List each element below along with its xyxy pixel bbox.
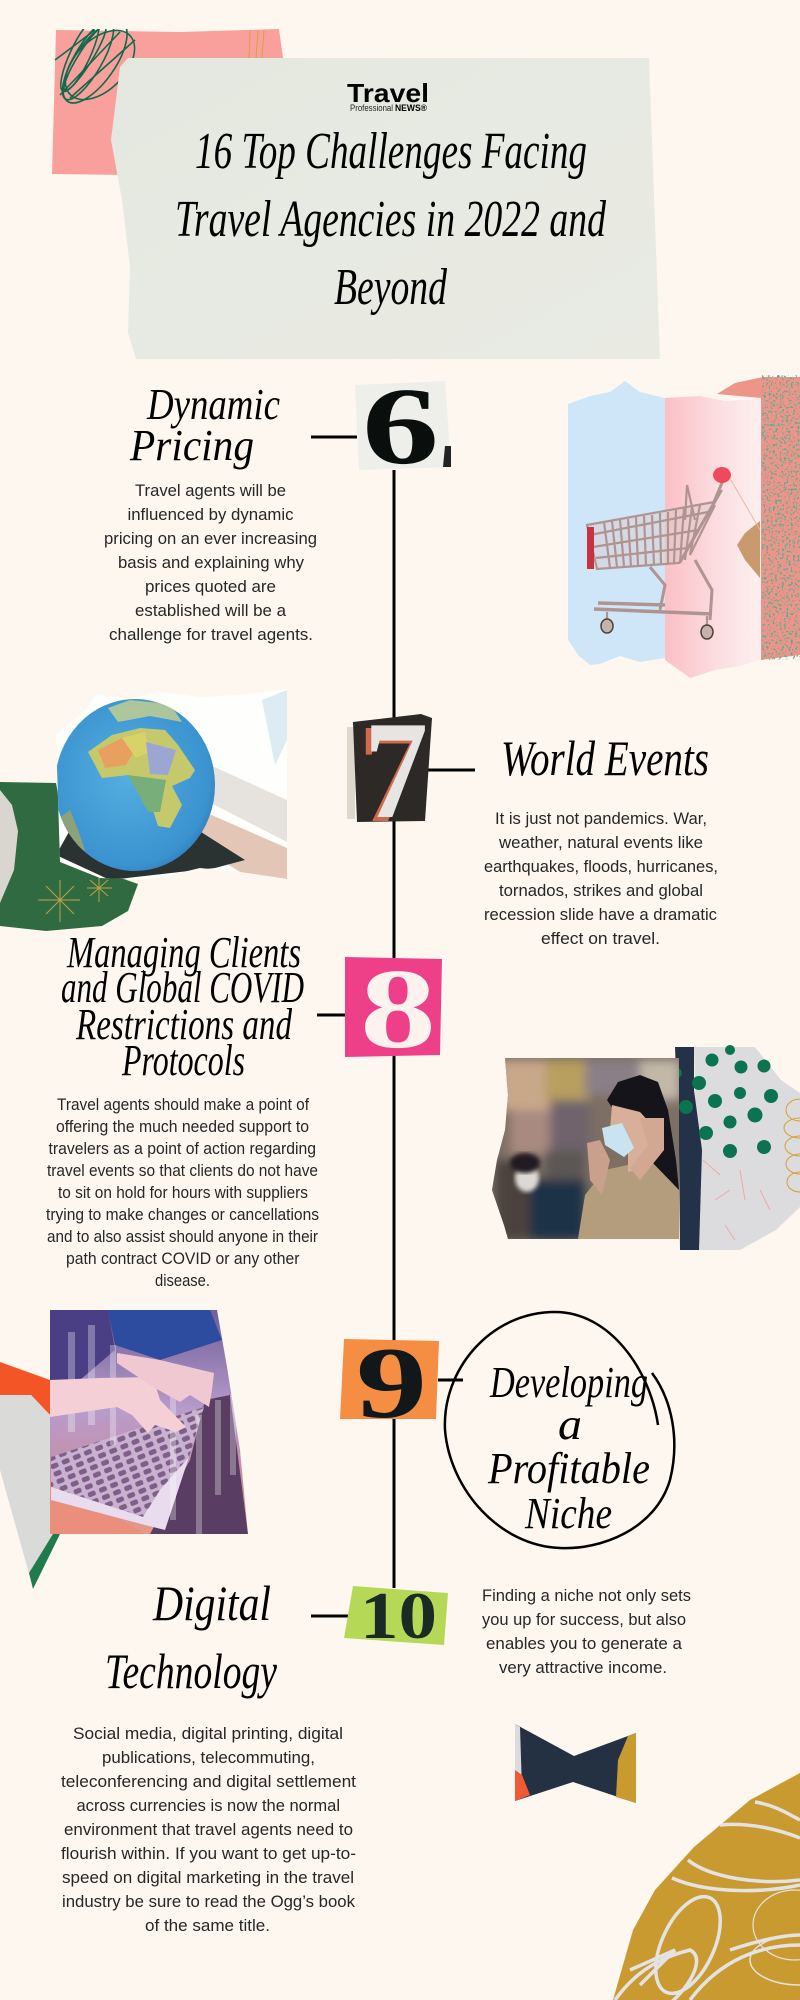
- section 8: managing clients: [46, 928, 442, 1290]
- newspaper: [213, 766, 287, 842]
- body text: established will be a: [135, 601, 287, 620]
- body text: It is just not pandemics. War,: [495, 809, 707, 828]
- globe: [55, 699, 215, 871]
- connector: [311, 1614, 348, 1618]
- raised hands: [630, 1118, 664, 1180]
- neck and face: [610, 1105, 652, 1172]
- body text: flourish within. If you want to get up-to-: [61, 1844, 356, 1863]
- collage: gold paper with white scribbles: [613, 1773, 800, 2000]
- wheels: [601, 619, 613, 633]
- body text: [104, 481, 317, 644]
- body text: recession slide have a dramatic: [484, 905, 717, 924]
- collage: grey paper with green dots: [672, 1045, 800, 1250]
- body text: travel events so that clients do not have: [47, 1161, 318, 1180]
- heading: Managing Clients and Global COVID Restrictions and Protocols: Restrictions and: [75, 1000, 293, 1049]
- body text: effect on travel.: [541, 929, 660, 948]
- body text: [484, 809, 718, 948]
- section 6: dynamic pricing: [104, 365, 451, 644]
- cart handle: [713, 467, 731, 483]
- body text: travelers as a point of action regarding: [48, 1139, 316, 1158]
- collage: navy bow-tie paper: [515, 1724, 636, 1803]
- connector: [438, 1378, 463, 1382]
- title: Travel Agencies in 2022 and: [175, 191, 607, 248]
- collage: orange and grey paper shards: [0, 1362, 60, 1589]
- body text: disease.: [155, 1271, 210, 1290]
- number tile 7: 7: [364, 693, 428, 848]
- heading: World Events: World Events: [501, 730, 709, 786]
- title: 16 Top Challenges Facing: [195, 123, 587, 180]
- keyboard: [51, 1407, 204, 1517]
- heading: Digital Technology: Technology: [105, 1643, 278, 1699]
- heading: Dynamic Pricing: [129, 380, 280, 470]
- header paper panel: [111, 58, 660, 359]
- background person: [515, 1164, 539, 1192]
- body text: very attractive income.: [499, 1658, 667, 1677]
- connector: [426, 768, 475, 772]
- heading: Developing a Profitable Niche: [487, 1358, 650, 1538]
- gold scribble: [784, 1099, 800, 1192]
- photo: laptop and data overlay: [50, 1310, 250, 1540]
- body text: enables you to generate a: [486, 1634, 683, 1653]
- number tile 10: 10: [360, 1579, 437, 1653]
- hair: [607, 1075, 679, 1190]
- Africa and continents: [57, 700, 195, 855]
- body text: Finding a niche not only sets: [482, 1586, 691, 1605]
- heading: Managing Clients and Global COVID Restrictions and Protocols: and Global COVID: [61, 963, 304, 1012]
- body text: [61, 1724, 356, 1935]
- heading: Dynamic Pricing: Pricing: [129, 421, 254, 470]
- body text: of the same title.: [145, 1916, 270, 1935]
- logo: Travel Professional News: Professional: [350, 103, 393, 113]
- gold stars: [38, 876, 112, 922]
- logo: Travel Professional News: Travel: [347, 78, 429, 108]
- title: [175, 123, 607, 316]
- body text: industry be sure to read the Ogg’s book: [62, 1892, 355, 1911]
- mask: [602, 1123, 634, 1157]
- body text: influenced by dynamic: [128, 505, 294, 524]
- heading: Dynamic Pricing: Dynamic: [146, 380, 280, 429]
- connector: [317, 1014, 345, 1016]
- body text: Travel agents should make a point of: [57, 1095, 309, 1114]
- body text: to sit on hold for hours with suppliers: [58, 1183, 308, 1202]
- green dots: [672, 1045, 778, 1158]
- body text: Travel agents will be: [135, 481, 286, 500]
- coat: [578, 1160, 679, 1239]
- body text: [46, 1095, 319, 1290]
- body text: trying to make changes or cancellations: [46, 1205, 319, 1224]
- heading: Managing Clients and Global COVID Restrictions and Protocols: Protocols: [121, 1036, 245, 1085]
- number tile 9: [340, 1327, 439, 1440]
- heading: Developing a Profitable Niche: Profitable: [487, 1444, 650, 1493]
- body text: challenge for travel agents.: [109, 625, 313, 644]
- heading: Developing a Profitable Niche: Developing: [489, 1358, 648, 1407]
- section 7: world events: [347, 693, 718, 948]
- number tile 8: 8: [360, 945, 436, 1072]
- number tile 6: 6: [362, 365, 439, 487]
- title: Beyond: [334, 259, 448, 316]
- photo: woman wearing a mask: [490, 1056, 680, 1241]
- body text: environment that travel agents need to: [64, 1820, 353, 1839]
- body text: and to also assist should anyone in their: [47, 1227, 318, 1246]
- price tag: [737, 521, 760, 578]
- photo: globe on newspaper: [55, 689, 287, 880]
- number tile 10: [344, 1579, 448, 1653]
- cart icon: [587, 478, 724, 628]
- number tile 9: 9: [356, 1327, 427, 1440]
- heading: Managing Clients and Global COVID Restrictions and Protocols: [61, 928, 304, 1085]
- bars: [68, 1325, 236, 1540]
- heading: Digital Technology: [105, 1575, 278, 1699]
- body text: pricing on an ever increasing: [104, 529, 317, 548]
- hands: [50, 1377, 186, 1433]
- body text: basis and explaining why: [118, 553, 304, 572]
- body text: teleconferencing and digital settlement: [61, 1772, 356, 1791]
- body text: across currencies is now the normal: [76, 1796, 340, 1815]
- body text: [482, 1586, 691, 1677]
- body text: speed on digital marketing in the travel: [62, 1868, 354, 1887]
- hand-drawn circle: [445, 1312, 674, 1548]
- section 7 decoration: green paper: [0, 782, 138, 931]
- heading: Managing Clients and Global COVID Restrictions and Protocols: Managing Clients: [66, 928, 301, 977]
- heading: Developing a Profitable Niche: Niche: [524, 1489, 612, 1538]
- textured pink paper: [717, 375, 800, 660]
- body text: tornados, strikes and global: [499, 881, 703, 900]
- body text: weather, natural events like: [498, 833, 703, 852]
- header collage: pink torn paper: [52, 29, 283, 175]
- body text: you up for success, but also: [482, 1610, 686, 1629]
- body text: path contract COVID or any other: [66, 1249, 300, 1268]
- body text: offering the much needed support to: [56, 1117, 309, 1136]
- connector: [311, 436, 357, 438]
- number tile 8: [345, 945, 442, 1072]
- timeline line: [392, 470, 396, 1588]
- body text: earthquakes, floods, hurricanes,: [484, 857, 718, 876]
- navy strip: [675, 1047, 702, 1250]
- logo: Travel Professional News: NEWS®: [395, 103, 427, 113]
- body text: publications, telecommuting,: [102, 1748, 315, 1767]
- body text: prices quoted are: [145, 577, 276, 596]
- heading: Developing a Profitable Niche: a: [558, 1400, 582, 1449]
- number tile 6: [355, 365, 451, 487]
- section 10: digital technology: [61, 1575, 448, 1935]
- heading: Digital Technology: Digital: [152, 1575, 271, 1631]
- photo: shopping cart collage: [568, 375, 800, 678]
- body text: Social media, digital printing, digital: [73, 1724, 343, 1743]
- number tile 7: 7: [358, 694, 426, 852]
- section 9: developing a profitable niche: [340, 1312, 691, 1677]
